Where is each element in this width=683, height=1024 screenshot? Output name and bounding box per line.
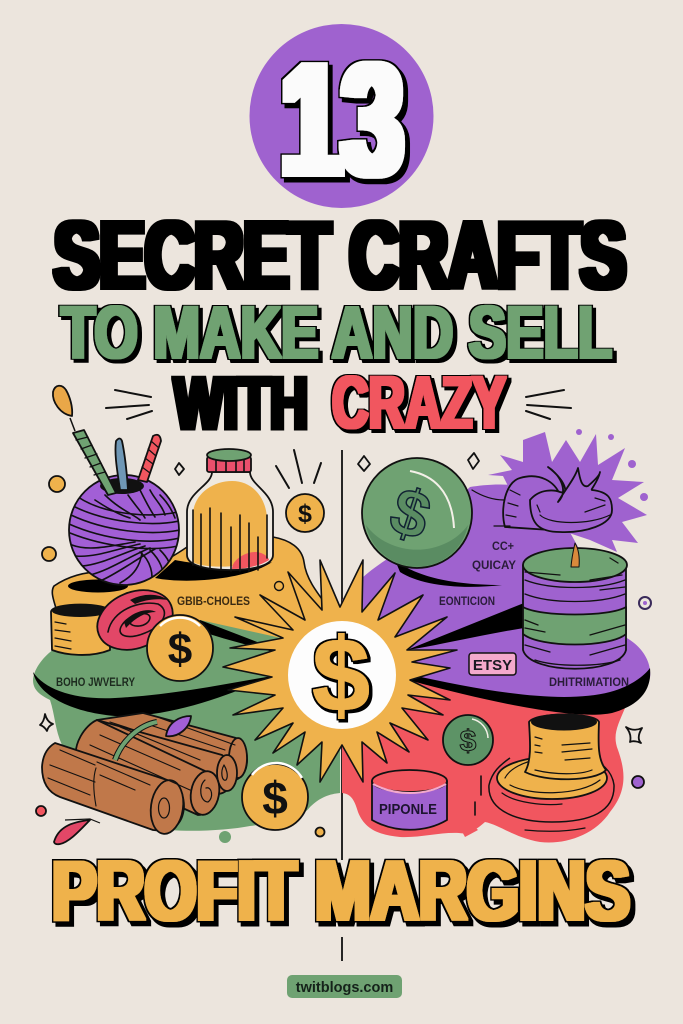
brim bbox=[497, 757, 607, 799]
icon: small green coin: $ bbox=[460, 725, 477, 758]
panel: yellow blob bbox=[52, 535, 330, 650]
icon: yellow cup bbox=[51, 604, 110, 655]
center divider line bbox=[341, 450, 343, 961]
icon: red spiral roll bbox=[88, 579, 182, 661]
label: etsy: ETSY bbox=[473, 657, 512, 674]
yarn strands bbox=[69, 490, 180, 587]
needle: blue bbox=[115, 438, 128, 490]
cup bbox=[525, 714, 606, 779]
sun rays bbox=[223, 560, 457, 782]
website pill: twitblogs.com bbox=[296, 980, 393, 996]
text label: gbib-choles: GBIB-CHOLES bbox=[177, 594, 250, 608]
icon: glass jar bbox=[187, 449, 273, 571]
middle log bbox=[76, 720, 219, 815]
jar lid bbox=[207, 449, 251, 472]
subtitle: with crazy bbox=[174, 361, 506, 445]
icon: large dollar coin bottom bbox=[242, 763, 308, 830]
icon: log bundle bbox=[42, 713, 247, 836]
dollar sign: $ bbox=[312, 618, 370, 734]
icon: central sunburst with dollar bbox=[223, 560, 457, 782]
third log bbox=[97, 720, 232, 794]
icon: purple tin piponle bbox=[372, 770, 447, 830]
icon: green dollar ball bbox=[362, 458, 472, 568]
needle: brush bbox=[53, 386, 75, 431]
back log bbox=[97, 713, 247, 780]
text label: eonticion: EONTICION bbox=[439, 594, 495, 608]
sparkles bbox=[40, 453, 642, 743]
panel: purple blob bbox=[342, 485, 650, 705]
green band bbox=[115, 722, 157, 760]
panel: purple burst bbox=[488, 432, 647, 552]
candle wick bbox=[571, 543, 579, 567]
plate bbox=[489, 758, 614, 822]
decorative dots bottom left bbox=[36, 806, 324, 843]
icon: small dollar coin with rays: $ bbox=[298, 500, 312, 528]
text label: quicay: QUICAY bbox=[472, 558, 516, 572]
yarn ball bbox=[69, 475, 179, 585]
text label: cc+: CC+ bbox=[492, 539, 514, 553]
icon: large dollar coin left: $ bbox=[168, 625, 192, 674]
icon: feather bbox=[54, 819, 100, 844]
label: etsy bbox=[469, 653, 516, 675]
icon: yarn ball with needles bbox=[53, 386, 180, 587]
small marks on red panel bbox=[459, 776, 481, 837]
icon: small dollar coin with rays bbox=[276, 450, 324, 532]
icon: stacked candle bbox=[523, 543, 627, 669]
website pill bbox=[287, 975, 402, 998]
icon: purple tin piponle: PIPONLE bbox=[379, 801, 437, 818]
badge: number 13: 13 bbox=[281, 32, 403, 208]
icon: green dollar ball: $ bbox=[382, 472, 440, 554]
wood grain bbox=[48, 718, 235, 806]
subtitle: with crazy: WITH bbox=[174, 361, 308, 445]
text label: boho jewelry: BOHO JWVELRY bbox=[56, 675, 135, 689]
decorative coins left bbox=[42, 476, 284, 590]
icon: large dollar coin left bbox=[147, 615, 213, 681]
panel: green blob bbox=[33, 620, 340, 831]
panel: red blob bbox=[342, 660, 625, 843]
black swooshes bbox=[33, 560, 650, 716]
front log bbox=[42, 743, 184, 831]
decorative dots right bbox=[576, 429, 651, 788]
icon: pottery wheel with cup bbox=[489, 714, 614, 831]
subtitle: with crazy: CRAZY bbox=[332, 361, 506, 444]
purple leaf bbox=[166, 716, 191, 736]
needle: green bbox=[73, 430, 116, 495]
text label: dhitrimation: DHITRIMATION bbox=[549, 675, 629, 689]
rays beside heading bbox=[106, 390, 571, 419]
white disc bbox=[288, 621, 396, 729]
icon: large dollar coin bottom: $ bbox=[262, 772, 288, 824]
icon: purple lump bbox=[472, 467, 612, 532]
needle: red bbox=[138, 435, 161, 482]
icon: small green coin bbox=[443, 715, 493, 765]
